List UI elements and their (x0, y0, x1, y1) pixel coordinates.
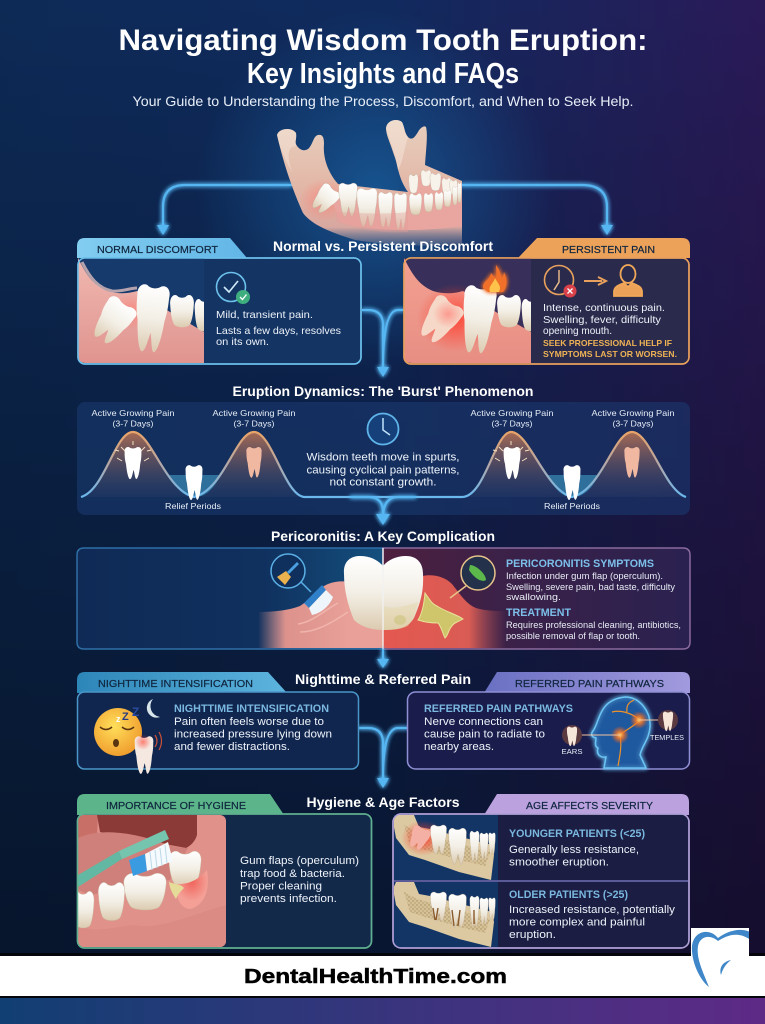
heading: hygiene and age: Hygiene & Age Factors (306, 794, 460, 810)
icon: ears tooth: EARS (562, 747, 582, 756)
text: referred pain: Nerve connections can (424, 716, 543, 728)
text: treatment (506, 607, 681, 641)
title: Navigating Wisdom Tooth Eruption: (118, 24, 648, 57)
illustration: gum and tooth (258, 556, 506, 648)
panel: pericoronitis (77, 548, 690, 649)
icon: cleaning brush (271, 554, 333, 615)
icon: teeth on wave (115, 441, 640, 500)
title (118, 24, 648, 90)
text: younger patients: Generally less resistance, (509, 844, 639, 856)
text: referred pain: REFERRED PAIN PATHWAYS (424, 703, 573, 715)
arrow: jaw to persistent pain (460, 185, 613, 235)
text: normal discomfort (216, 309, 341, 348)
text: burst description: Wisdom teeth move in spurts, (306, 452, 460, 464)
text: nighttime: increased pressure lying down (174, 728, 332, 740)
tab: age: AGE AFFECTS SEVERITY (526, 801, 653, 812)
text: treatment: possible removal of flap or tooth. (506, 631, 640, 641)
text: older patients: Increased resistance, potentially (509, 904, 676, 916)
icon: clock with check (216, 272, 250, 304)
text: symptoms: Infection under gum flap (operculum). (506, 571, 663, 581)
text: nighttime: NIGHTTIME INTENSIFICATION (174, 703, 329, 715)
divider (382, 548, 384, 649)
text: younger patients: smoother eruption. (509, 856, 609, 868)
text: younger patients: YOUNGER PATIENTS (<25) (509, 828, 645, 840)
panel: importance of hygiene (72, 794, 372, 948)
panel: nighttime intensification (77, 672, 358, 774)
icon: ears tooth (562, 725, 582, 756)
text: symptoms: PERICORONITIS SYMPTOMS (506, 558, 654, 570)
heading: pericoronitis: Pericoronitis: A Key Complication (271, 528, 495, 544)
text: younger patients (509, 828, 645, 868)
arrow: eruption to pericoronitis (350, 497, 416, 525)
icon: sleeping face: Z (132, 705, 139, 719)
panel: normal discomfort (77, 238, 361, 364)
icon: temples tooth: TEMPLES (650, 733, 684, 742)
icon: clock with x (544, 266, 576, 298)
text: nighttime: and fewer distractions. (174, 741, 290, 753)
text: persistent pain (543, 302, 665, 337)
illustration: younger jaw (393, 815, 498, 880)
text: normal discomfort: Lasts a few days, resolves (216, 325, 341, 337)
text: older patients (509, 889, 676, 941)
tab: persistent pain (518, 238, 690, 258)
labels: relief periods: Relief Periods (165, 501, 221, 511)
heading: eruption dynamics: Eruption Dynamics: The 'Burst' Phenomenon (232, 383, 534, 399)
tab: normal discomfort: NORMAL DISCOMFORT (97, 245, 218, 256)
connector: panels to eruption section (362, 310, 404, 377)
tab: hygiene (77, 794, 284, 815)
panel: eruption dynamics (77, 402, 690, 515)
text: referred pain (424, 703, 573, 753)
tab: nighttime: NIGHTTIME INTENSIFICATION (98, 679, 253, 690)
illustration: mild tooth (78, 258, 213, 363)
labels: pain peaks: Active Growing Pain (212, 408, 296, 418)
text: normal discomfort: Mild, transient pain. (216, 309, 313, 321)
panel: persistent pain (404, 238, 690, 364)
tab: age (484, 794, 689, 815)
icon: clock (368, 414, 398, 444)
text: treatment: TREATMENT (506, 607, 571, 619)
icon: sleeping face (94, 699, 162, 774)
labels: pain peaks: (3-7 Days) (234, 418, 275, 428)
icon: doctor (614, 265, 642, 296)
labels: pain peaks (92, 408, 675, 428)
text: treatment: Requires professional cleaning, antibiotics, (506, 620, 681, 630)
tab: normal discomfort (77, 238, 247, 258)
callout: seek help: SEEK PROFESSIONAL HELP IF (543, 338, 672, 348)
text: hygiene: Proper cleaning (240, 880, 322, 892)
text: nighttime (174, 703, 332, 753)
labels: pain peaks: (3-7 Days) (612, 418, 654, 428)
labels: relief periods (165, 501, 600, 511)
labels: pain peaks: (3-7 Days) (112, 418, 154, 428)
panel: age affects severity (393, 794, 689, 948)
text: referred pain: cause pain to radiate to (424, 728, 545, 740)
tab: referred pain: REFERRED PAIN PATHWAYS (515, 679, 664, 690)
text: symptoms: Swelling, severe pain, bad taste, difficulty (506, 582, 676, 592)
jaw illustration (277, 120, 462, 246)
text: burst description: causing cyclical pain patterns, (306, 464, 460, 476)
icon: bacteria (450, 556, 495, 598)
text: burst description (306, 452, 460, 488)
text: persistent pain: Swelling, fever, difficulty (543, 314, 662, 326)
text: older patients: OLDER PATIENTS (>25) (509, 889, 628, 901)
callout: seek help (543, 338, 677, 359)
subtitle: Your Guide to Understanding the Process, Discomfort, and When to Seek Help. (132, 94, 634, 109)
labels: pain peaks: Active Growing Pain (470, 408, 554, 418)
icon: temples tooth (650, 710, 684, 742)
text: older patients: more complex and painful (509, 916, 645, 928)
heading: nighttime and referred: Nighttime & Referred Pain (295, 671, 471, 687)
illustration: head with nerves (582, 697, 660, 768)
arrow: pericoronitis to nighttime (377, 649, 389, 668)
labels: pain peaks: Active Growing Pain (92, 408, 175, 418)
title: Key Insights and FAQs (247, 58, 519, 90)
text: symptoms: swallowing. (506, 592, 561, 602)
icon: flame (483, 265, 507, 292)
text: hygiene: prevents infection. (240, 893, 337, 905)
illustration: older jaw (393, 882, 498, 947)
text: hygiene: trap food & bacteria. (240, 868, 345, 880)
text: normal discomfort: on its own. (216, 336, 269, 348)
footer brand text: DentalHealthTime.com (244, 965, 507, 988)
back teeth row (409, 170, 457, 195)
logo: tooth (691, 928, 752, 987)
text: nighttime: Pain often feels worse due to (174, 716, 324, 728)
text: older patients: eruption. (509, 929, 556, 941)
heading: normal vs persistent: Normal vs. Persistent Discomfort (273, 239, 494, 254)
arrow: to doctor (584, 277, 606, 285)
tab: referred pain (484, 672, 690, 693)
text: persistent pain: Intense, continuous pain. (543, 302, 665, 314)
text: hygiene (240, 855, 359, 905)
labels: pain peaks: Active Growing Pain (592, 408, 675, 418)
labels: pain peaks: (3-7 Days) (492, 418, 533, 428)
connector: nighttime to hygiene (358, 728, 408, 788)
callout: seek help: SYMPTOMS LAST OR WORSEN. (543, 349, 677, 359)
illustration: inflamed tooth (404, 258, 540, 363)
tab: nighttime (77, 672, 287, 693)
panel: referred pain pathways (408, 672, 690, 769)
text: burst description: not constant growth. (330, 476, 436, 488)
footer band (0, 953, 765, 1024)
text: referred pain: nearby areas. (424, 741, 494, 753)
text: symptoms (506, 558, 676, 602)
front teeth (308, 182, 407, 229)
icon: sleeping face: z (116, 714, 121, 724)
chart: burst wave (81, 432, 686, 497)
tab: persistent pain: PERSISTENT PAIN (562, 245, 655, 256)
text: persistent pain: opening mouth. (543, 325, 612, 337)
illustration: brushing teeth (72, 815, 226, 947)
labels: relief periods: Relief Periods (544, 501, 600, 511)
arrow: jaw to normal discomfort (157, 185, 292, 235)
text: hygiene: Gum flaps (operculum) (240, 855, 359, 867)
tab: hygiene: IMPORTANCE OF HYGIENE (106, 801, 246, 812)
icon: sleeping face: Z (122, 711, 129, 723)
